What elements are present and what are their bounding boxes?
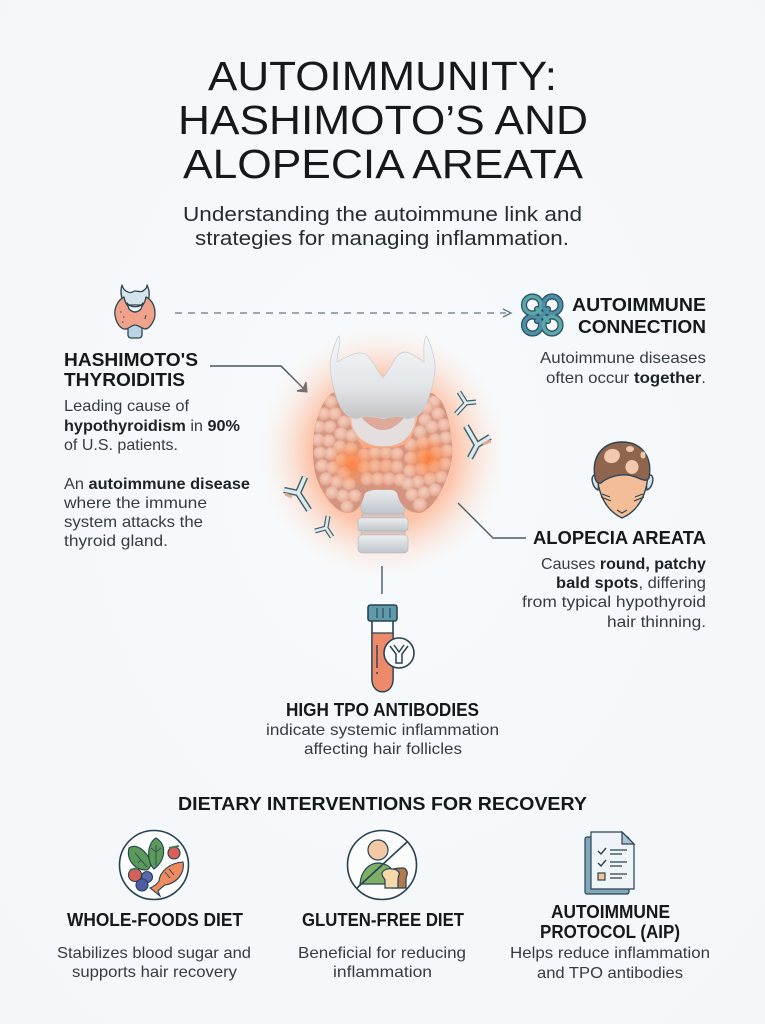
inflammation glow [258, 324, 508, 580]
text: gluten-free description [298, 945, 466, 981]
panel: Hashimoto's text [63, 350, 250, 550]
text: systemic inflammation: affecting hair follicles [304, 741, 462, 758]
hot spots [326, 437, 378, 489]
thyroid cartilage [330, 336, 435, 419]
heading: autoimmune protocol: PROTOCOL (AIP) [540, 922, 680, 942]
heading: Hashimoto's: THYROIDITIS [64, 370, 185, 390]
heading: alopecia areata: ALOPECIA AREATA [533, 528, 706, 548]
icon: small thyroid [115, 285, 155, 338]
heading: autoimmune protocol [540, 902, 680, 942]
text: leading cause [64, 398, 240, 454]
heading: autoimmune connection: AUTOIMMUNE [572, 295, 706, 315]
text: AIP description [510, 945, 710, 982]
heading: whole-foods diet: WHOLE-FOODS DIET [67, 910, 243, 930]
text: systemic inflammation: indicate systemic inflammation [266, 722, 499, 739]
text: AIP description: Helps reduce inflammation [510, 945, 710, 962]
icon: test tube with antibody [368, 605, 414, 692]
panel: autoimmune connection text [540, 295, 706, 387]
text: patchy bald spots: from typical hypothyroid [522, 594, 706, 611]
text: occur together: Autoimmune diseases [540, 350, 706, 367]
heading: autoimmune protocol: AUTOIMMUNE [551, 902, 670, 922]
panel: alopecia areata text [522, 528, 706, 631]
panel: high TPO antibodies [266, 700, 499, 758]
trachea [358, 488, 408, 553]
text: autoimmune disease: thyroid gland. [64, 533, 168, 550]
text: autoimmune disease: An autoimmune disease [64, 476, 250, 493]
cricoid [351, 412, 415, 446]
heading: autoimmune connection [572, 295, 706, 337]
leader line: alopecia [458, 503, 526, 538]
panel: gluten-free diet [298, 910, 466, 981]
text: systemic inflammation [266, 722, 499, 758]
text: patchy bald spots: bald spots, differing [556, 575, 706, 592]
panel: whole-foods diet [57, 910, 251, 981]
arrow: Hashimoto's to thyroid [210, 366, 307, 392]
heading: Hashimoto's [64, 350, 198, 390]
text: autoimmune disease [63, 476, 250, 550]
text: gluten-free description: inflammation [333, 964, 432, 981]
text: whole-foods description: supports hair recovery [72, 964, 237, 981]
icon: autoimmune connection knot [524, 296, 560, 334]
illustration: thyroid gland [271, 336, 496, 567]
title: AUTOIMMUNITY: [208, 53, 557, 99]
lobules [312, 396, 454, 514]
icon: gluten-free [348, 830, 416, 900]
text: occur together: often occur together. [546, 370, 706, 387]
text: autoimmune disease: where the immune [63, 495, 207, 512]
subtitle: strategies for managing inflammation. [195, 228, 569, 250]
arrow: dashed link from thyroid icon to connection [175, 309, 511, 317]
heading: autoimmune connection: CONNECTION [578, 317, 706, 337]
text: gluten-free description: Beneficial for reducing [298, 945, 466, 962]
text: occur together [540, 350, 706, 387]
heading: Hashimoto's: HASHIMOTO'S [64, 350, 198, 370]
text: leading cause: of U.S. patients. [64, 437, 178, 454]
icon: head with bald patches [592, 442, 653, 518]
title: HASHIMOTO’S AND [178, 97, 588, 143]
text: AIP description: and TPO antibodies [537, 965, 683, 982]
antibody fragments [284, 392, 490, 537]
panel: autoimmune protocol [510, 902, 710, 982]
heading: dietary interventions: DIETARY INTERVENTIONS FOR RECOVERY [178, 794, 587, 814]
text: patchy bald spots: Causes round, patchy [541, 556, 706, 573]
icon: protocol checklist [585, 832, 634, 894]
text: whole-foods description [57, 945, 251, 981]
icon: whole foods plate [120, 830, 188, 900]
text: whole-foods description: Stabilizes blood sugar and [57, 945, 251, 962]
subtitle: Understanding the autoimmune link and [183, 204, 582, 226]
title [178, 53, 588, 187]
text: leading cause: Leading cause of [64, 398, 190, 415]
title: ALOPECIA AREATA [183, 141, 584, 187]
thyroid lobes [313, 393, 452, 513]
text: patchy bald spots [522, 556, 706, 631]
leader line: thyroid to TPO test tube [381, 566, 383, 594]
heading: gluten-free diet: GLUTEN-FREE DIET [302, 910, 464, 930]
text: leading cause: hypothyroidism in 90% [64, 418, 240, 435]
subtitle [183, 204, 582, 250]
text: autoimmune disease: system attacks the [64, 514, 203, 531]
heading: high TPO antibodies: HIGH TPO ANTIBODIES [286, 700, 479, 720]
text: patchy bald spots: hair thinning. [607, 614, 706, 631]
